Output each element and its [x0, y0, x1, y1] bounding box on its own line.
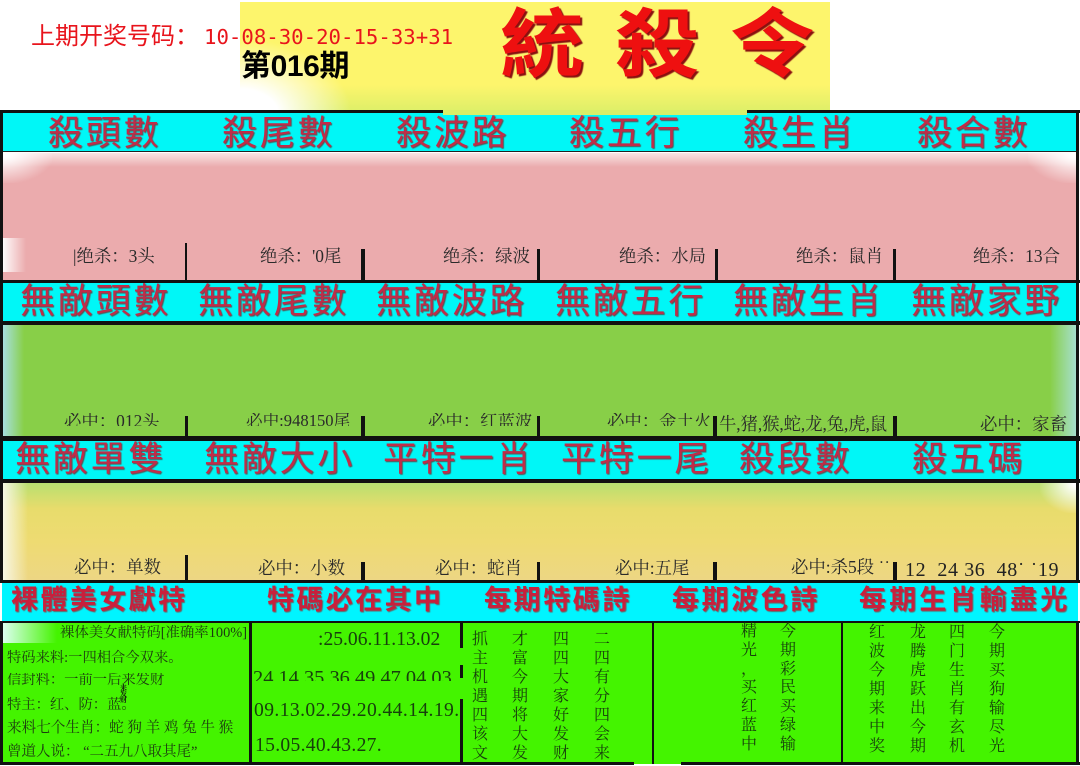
- poem: wave colour: [741, 622, 796, 753]
- panel: must-hit stats: [0, 280, 1080, 436]
- panel: kill stats: [0, 110, 1080, 280]
- poem: zodiac: 今期买狗输尽光: [989, 624, 1005, 755]
- poem: wave colour: 精光: [741, 623, 757, 659]
- answers: 必中：单数: [74, 557, 161, 577]
- headings: 無敵頭數: [20, 282, 171, 321]
- lime background: [2, 623, 1078, 764]
- panel: special number tips: 每期特碼詩: [484, 585, 632, 615]
- pink background: [2, 153, 1078, 280]
- panel: kill stats: 殺生肖: [743, 114, 856, 153]
- poem: zodiac: 龙腾虎跃出今期: [910, 624, 926, 755]
- panel: must-hit stats: 無敵生肖: [733, 282, 884, 321]
- green background: [2, 325, 1078, 436]
- text block: beauty tips: 曾道人说： “二五九八取其尾”: [7, 744, 198, 760]
- panel: odds and evens: 必中:五尾: [615, 558, 689, 578]
- answers: |绝杀：3头: [73, 246, 155, 266]
- panel: must-hit stats: 牛,猪,猴,蛇,龙,兔,虎,鼠: [719, 414, 887, 434]
- panel: odds and evens: 必中：蛇肖: [435, 558, 522, 578]
- poem: zodiac: 红波今期来中奖: [869, 624, 885, 755]
- text block: beauty tips: 来料七个生肖：蛇 狗 羊 鸡 兔 牛 猴: [7, 720, 233, 736]
- panel: special number tips: 特碼必在其中: [267, 585, 443, 615]
- poem: zodiac: 四门生肖有玄机: [949, 624, 965, 755]
- panel: kill stats: 殺五行: [569, 114, 682, 153]
- panel: kill stats: 殺波路: [396, 114, 509, 153]
- text block: beauty tips: 裸体美女献特码[准确率100%]: [60, 625, 247, 641]
- panel: must-hit stats: 無敵五行: [555, 282, 706, 321]
- panel: special number tips: 每期波色詩: [672, 585, 820, 615]
- panel: kill stats: 殺合數: [917, 114, 1030, 153]
- panel: odds and evens: 殺段數: [739, 440, 852, 479]
- yellow background: [2, 483, 1078, 581]
- text block: special numbers: [253, 629, 460, 756]
- panel: kill stats: 绝杀：鼠肖: [796, 246, 883, 266]
- panel: odds and evens: 必中:杀5段 ˙˙: [791, 557, 890, 577]
- dividers: [185, 555, 188, 582]
- poem: special numbers: 抓主机遇四该文: [472, 631, 488, 762]
- text block: beauty tips: [7, 624, 247, 760]
- panel: kill stats: 绝杀：绿波: [443, 246, 530, 266]
- poem: special numbers: 二四有分四会来: [594, 631, 610, 762]
- panel: must-hit stats: 無敵波路: [376, 282, 527, 321]
- panel: kill stats: 绝杀：水局: [619, 246, 706, 266]
- previous draw numbers: 上期开奖号码：10-08-30-20-15-33+31: [31, 23, 453, 50]
- text block: special numbers: 09.13.02.29.20.44.14.19.: [254, 700, 460, 721]
- panel: kill stats: 殺尾數: [222, 114, 335, 153]
- dividers: [249, 623, 252, 764]
- panel: odds and evens: 平特一肖: [383, 440, 534, 479]
- text block: special numbers: :25.06.11.13.02: [318, 629, 440, 650]
- panel: special number tips: [0, 580, 1080, 765]
- panel: odds and evens: 12 24 36 48˙ ˙19: [905, 559, 1059, 581]
- headings: 裸體美女獻特: [11, 585, 187, 615]
- header background: [240, 2, 830, 110]
- small stamped glyphs: 来发财: [120, 684, 127, 704]
- poem: special numbers: 才富今期将大发: [512, 631, 528, 762]
- panel: odds and evens: 無敵大小: [204, 440, 355, 479]
- panel: must-hit stats: 無敵家野: [911, 282, 1062, 321]
- panel: odds and evens: [0, 436, 1080, 581]
- dividers: [185, 243, 187, 281]
- panel: odds and evens: 必中：小数: [258, 558, 345, 578]
- panel: kill stats: 绝杀：13合: [973, 246, 1060, 266]
- dividers: [185, 416, 188, 437]
- poem: special numbers: 四四大家好发财: [553, 631, 569, 762]
- text block: special numbers: 15.05.40.43.27.: [255, 735, 382, 756]
- issue number: 第016期: [241, 50, 349, 83]
- poem: zodiac: [869, 623, 1005, 755]
- panel: odds and evens: 殺五碼: [912, 440, 1025, 479]
- poem: special numbers: [472, 630, 610, 762]
- panel: must-hit stats: 必中：家畜: [980, 414, 1067, 434]
- text block: beauty tips: 特主：红、防：蓝。: [7, 697, 136, 713]
- poem: wave colour: ，买红蓝中: [741, 661, 757, 753]
- panel: must-hit stats: 無敵尾數: [198, 282, 349, 321]
- poem: wave colour: 今期彩民买绿输: [780, 623, 796, 753]
- panel: special number tips: 每期生肖輸盡光: [859, 585, 1070, 615]
- text block: beauty tips: 特码来料:一四相合今双来。: [7, 650, 183, 666]
- headings: 殺頭數: [48, 114, 161, 153]
- panel: odds and evens: 平特一尾: [561, 440, 712, 479]
- panel: kill stats: 绝杀：'0尾: [260, 246, 341, 266]
- headings: 無敵單雙: [15, 440, 166, 479]
